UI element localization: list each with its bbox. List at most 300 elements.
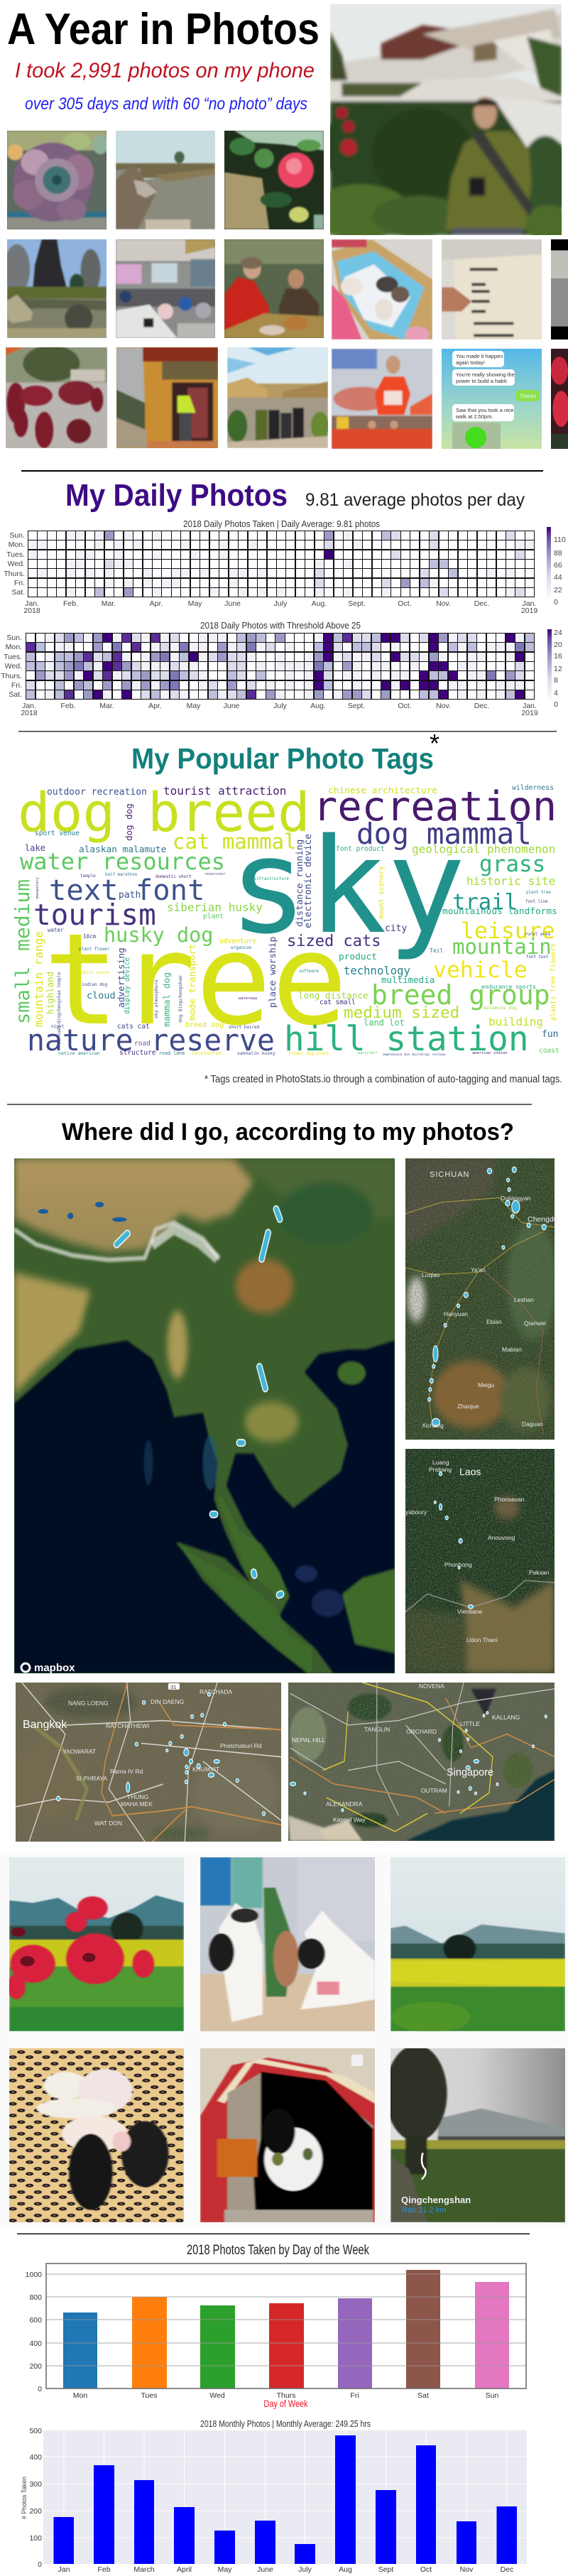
- heatmap 1 colorbar: [547, 527, 566, 607]
- bar chart: photos by day of week: Fri: [350, 2391, 359, 2400]
- bar chart: photos by day of week: 0: [38, 2385, 42, 2393]
- word cloud: water resources: [20, 848, 225, 875]
- bar chart: monthly photos: Dec: [501, 2565, 513, 2574]
- word cloud: sport venue: [35, 830, 80, 837]
- heatmap 2 day labels: Sun.: [6, 634, 22, 642]
- bar chart: photos by day of week: 800: [29, 2293, 42, 2302]
- heatmap 1 month labels: Jan.: [25, 599, 39, 608]
- heatmap 1 month labels: Sept.: [348, 599, 366, 608]
- map: Laos: Laos: [459, 1466, 481, 1477]
- photo: activity app messages: Saw that you took a nice: [456, 407, 514, 413]
- word cloud: dog dog: [124, 803, 134, 841]
- word cloud: tourist attraction: [163, 784, 286, 798]
- word cloud: geological phenomenon: [412, 842, 555, 856]
- map: Singapore: ORCHARD: [406, 1728, 437, 1735]
- photo: handwriting notebook: [442, 239, 542, 339]
- subtitle: total photos: I took 2,991 photos on my phone: [15, 59, 315, 82]
- asterisk: *: [430, 729, 439, 758]
- heatmap 2 colorbar: 20: [554, 641, 562, 649]
- photo: man in doorway: [116, 347, 218, 448]
- word cloud: display device: [124, 957, 131, 1014]
- bar chart: photos by day of week: 200: [29, 2362, 42, 2371]
- map: Sichuan: Leshan: [514, 1296, 534, 1303]
- average photos text: 9.81 average photos per day: [305, 490, 525, 510]
- heatmap 1 month labels: 2018: [23, 607, 40, 615]
- word cloud: advertising: [116, 947, 127, 1008]
- word cloud: outdoor recreation: [47, 787, 147, 798]
- word cloud: rural area: [525, 932, 551, 937]
- map: Laos: Pakxan: [529, 1569, 550, 1576]
- heatmap 2 month labels: Dec.: [474, 702, 489, 710]
- chart title: day of week: 2018 Photos Taken by Day of the Week: [187, 2243, 369, 2258]
- photo: marathon runner collage: [332, 349, 432, 449]
- heading: where did I go: Where did I go, according to my photos?: [62, 1119, 514, 1146]
- map: Singapore: ALEXANDRA: [326, 1800, 363, 1808]
- word cloud: 10cm: [83, 933, 97, 940]
- word cloud: siberian husky: [167, 901, 263, 914]
- heatmap 1 day labels: Wed.: [8, 560, 25, 568]
- map: Bangkok: [11, 1683, 281, 1842]
- map: Laos: Prabang: [429, 1466, 452, 1473]
- bar chart: photos by day of week: [26, 2243, 526, 2409]
- map: Bangkok: Rama IV Rd: [110, 1768, 143, 1775]
- heatmap 1 month labels: Oct.: [398, 599, 412, 608]
- heatmap 2 day labels: Tues.: [4, 653, 22, 661]
- photo: red camellia: [224, 131, 324, 229]
- word cloud: nature reserve: [27, 1023, 275, 1058]
- word cloud: long distance: [298, 990, 368, 1001]
- bar chart: photos by day of week: 400: [29, 2339, 42, 2348]
- photo: activity app messages: Thanks: [520, 394, 536, 399]
- word cloud: breed dog: [185, 1021, 224, 1029]
- photo: activity app messages: again today!: [456, 359, 485, 366]
- photo: tower and lake: [7, 239, 106, 338]
- word cloud: electronic device: [303, 834, 314, 928]
- chart title: monthly: 2018 Monthly Photos | Monthly Average: 249.25 hrs: [200, 2418, 371, 2429]
- map: Bangkok: Phetchaburi Rd: [220, 1742, 262, 1749]
- heatmap 2 month labels: 2019: [521, 709, 538, 717]
- heatmap 2 month labels: Feb.: [60, 702, 76, 710]
- word cloud: tourism: [33, 898, 156, 932]
- word cloud: medium sized: [344, 1004, 459, 1022]
- map: Bangkok: THUNG: [127, 1793, 148, 1800]
- word cloud: water: [48, 927, 64, 933]
- map: Singapore: TANGLIN: [364, 1726, 390, 1733]
- word cloud: technology: [344, 964, 410, 977]
- word cloud: highland: [45, 972, 55, 1014]
- map: Bangkok: DIN DAENG: [151, 1698, 184, 1705]
- word cloud: trail: [452, 890, 518, 915]
- photo: partial street: [551, 239, 568, 339]
- word cloud: husky dog: [104, 923, 213, 947]
- word cloud: place worship: [268, 937, 278, 1008]
- heatmap 1 colorbar: 22: [554, 586, 562, 594]
- heatmap 2 colorbar: 4: [554, 689, 558, 697]
- map: Sichuan: Ebian: [486, 1318, 502, 1325]
- section rule: [17, 2233, 530, 2234]
- map: Singapore: NOVENA: [419, 1683, 444, 1690]
- map: Laos: Anouvong: [488, 1534, 515, 1541]
- heatmap 1 day labels: Tues.: [6, 550, 25, 559]
- section rule: [7, 1104, 532, 1105]
- bar chart: photos by day of week: 1000: [26, 2271, 42, 2279]
- word cloud: breed group: [371, 979, 550, 1011]
- heatmap 1 month labels: July: [274, 599, 288, 608]
- bar chart: monthly photos: Sept: [378, 2565, 393, 2574]
- bar chart: monthly photos: 100: [29, 2534, 42, 2543]
- word cloud: Sichuan Qingchengshan temple: [57, 972, 62, 1044]
- bar chart: monthly photos: Nov: [460, 2565, 474, 2574]
- bar chart: monthly photos: 300: [29, 2480, 42, 2489]
- photo: activity app messages: You're really showing the: [456, 371, 515, 378]
- photo: rapeseed field and mountains: [390, 1857, 565, 2031]
- word cloud: cloud: [87, 990, 116, 1001]
- word cloud: font product: [336, 845, 385, 853]
- word cloud: mount scenery: [378, 866, 386, 919]
- heatmap 2 day labels: Fri.: [11, 681, 22, 690]
- word cloud: waterway: [239, 996, 258, 1001]
- map: Sichuan: Qianwei: [524, 1320, 546, 1327]
- heatmap 2 colorbar: 12: [554, 665, 562, 673]
- bar chart: monthly photos: July: [298, 2565, 312, 2574]
- y axis label: # Photos Taken: [21, 2477, 28, 2519]
- heatmap 1 month labels: May: [188, 599, 202, 608]
- heatmap 1 month labels: Apr.: [150, 599, 163, 608]
- word cloud: Teil: [430, 947, 443, 954]
- word cloud: cat mammal: [173, 830, 297, 854]
- map: Laos: yaboury: [405, 1509, 427, 1516]
- heatmap 2 month labels: May: [187, 702, 201, 710]
- heading: My Daily Photos: My Daily Photos: [65, 478, 288, 513]
- word cloud: infrastructure: [254, 877, 289, 881]
- map: Bangkok: MAHA MEK: [121, 1800, 153, 1808]
- word cloud: road lane: [159, 1050, 185, 1056]
- word cloud: vehicle: [433, 957, 528, 983]
- bar chart: monthly photos: Jan: [58, 2565, 70, 2574]
- word cloud: temple: [80, 874, 96, 879]
- word cloud: sized cats: [287, 933, 381, 950]
- word cloud: grass: [479, 852, 545, 877]
- hero photo: man at Potala Palace: [330, 4, 562, 235]
- word cloud: chinese architecture: [328, 786, 437, 796]
- heatmap 2 month labels: Mar.: [99, 702, 114, 710]
- heatmap 2 title: 2018 Daily Photos with Threshold Above 25: [200, 621, 361, 631]
- word cloud: sky atmosphere: [153, 979, 159, 1018]
- map: Singapore: OUTRAM: [421, 1787, 447, 1794]
- word cloud: sakhalin husky: [237, 1050, 275, 1056]
- bar chart: photos by day of week: Sat: [417, 2391, 429, 2400]
- photo: husky by river: [116, 131, 215, 229]
- heatmap 1 month labels: Dec.: [474, 599, 489, 608]
- map: Southeast Asia overview: [14, 1158, 395, 1674]
- bar chart: photos by day of week: 600: [29, 2316, 42, 2325]
- word cloud: indian dog: [82, 982, 108, 987]
- title: A Year in Photos: [7, 5, 320, 54]
- heatmap 1 month labels: 2019: [521, 607, 537, 615]
- heatmap 1 month labels: [23, 599, 537, 615]
- word cloud: historic site: [466, 874, 555, 888]
- photo: Qingchengshan run: Ran 21.2 km: [402, 2206, 446, 2214]
- bar chart: photos by day of week: Thurs: [277, 2391, 295, 2400]
- photo: activity app messages: walk at 2:50pm.: [455, 413, 493, 420]
- map: Bangkok: KHUMVIT: [192, 1766, 219, 1773]
- bar chart: monthly photos: 0: [38, 2560, 42, 2569]
- photo: newborn kittens on leopard fabric: [9, 2048, 184, 2222]
- word cloud: dog mammal: [356, 817, 532, 851]
- word cloud: city: [385, 923, 407, 934]
- photo: activity app messages: [442, 349, 542, 449]
- word cloud: multimedia: [381, 974, 435, 985]
- map: Sichuan: [405, 1158, 558, 1440]
- photo: debating monks: [6, 347, 107, 448]
- heatmap 1 colorbar: 88: [554, 549, 562, 558]
- photo: activity app messages: You made it happen: [456, 353, 503, 359]
- word cloud: adventure: [219, 938, 256, 945]
- bar chart: photos by day of week: Sun: [486, 2391, 498, 2400]
- heatmap 2 colorbar: 24: [554, 629, 562, 637]
- map: Sichuan: Dujiangyan: [501, 1195, 531, 1202]
- word cloud: half marathon: [105, 873, 137, 877]
- word cloud: endurance sports: [481, 984, 536, 990]
- heatmap 1 month labels: Mar.: [102, 599, 116, 608]
- word cloud: font text: [526, 955, 548, 960]
- map: Sichuan: Ya'an: [471, 1266, 486, 1273]
- word cloud: lake: [25, 843, 45, 853]
- map: Sichuan: Mabian: [502, 1346, 522, 1353]
- heatmap 2 month labels: June: [224, 702, 240, 710]
- bar chart: monthly photos: Oct: [420, 2565, 432, 2574]
- bar chart: monthly photos: Feb: [97, 2565, 111, 2574]
- word cloud: short haired: [229, 1025, 260, 1030]
- word cloud: alaskan malamute: [79, 844, 166, 855]
- heatmap 2 colorbar: [547, 629, 562, 709]
- map: Bangkok: Bangkok: [23, 1719, 67, 1731]
- bar chart: monthly photos: March: [133, 2565, 155, 2574]
- photo: activity app messages: power to build a habit.: [456, 378, 508, 384]
- map: Laos: [405, 1449, 555, 1673]
- word cloud: plant tree: [526, 891, 551, 895]
- word cloud: software: [299, 969, 319, 974]
- heatmap 1: daily photos taken: [28, 531, 535, 597]
- heatmap 1 day labels: Fri.: [14, 579, 25, 587]
- photo: partial red flowers: [551, 349, 568, 449]
- photo: cat in cat house: [200, 2048, 375, 2222]
- photo: two men eating: [224, 239, 324, 338]
- map: Bangkok: WAT DON: [94, 1820, 122, 1827]
- heatmap 1 colorbar: 0: [554, 598, 558, 607]
- word cloud: native american: [58, 1050, 100, 1056]
- word cloud: road: [134, 1040, 151, 1048]
- map: Singapore: KALLANG: [492, 1714, 520, 1721]
- map: Southeast Asia overview: mapbox: [34, 1662, 75, 1674]
- heatmap 1 day labels: Thurs.: [4, 570, 25, 578]
- map: Singapore: Singapore: [447, 1767, 493, 1778]
- heatmap 2: daily photos with threshold: [26, 633, 535, 700]
- bar chart: monthly photos: April: [177, 2565, 192, 2574]
- x axis label: day of week: Day of Week: [264, 2398, 308, 2409]
- heatmap 2 month labels: Aug.: [310, 702, 326, 710]
- heatmap 1 day labels: Sun.: [9, 531, 25, 540]
- word cloud: path: [119, 890, 141, 901]
- word cloud: mode transport: [187, 944, 198, 1021]
- word cloud: fun: [542, 1029, 558, 1040]
- word cloud: mountain: [452, 935, 552, 959]
- heatmap 2 month labels: Nov.: [436, 702, 451, 710]
- heatmap 1 title: 2018 Daily Photos Taken | Daily Average: 9.81 photos: [183, 519, 380, 529]
- map: Singapore: LITTLE: [460, 1720, 480, 1727]
- map: Laos: Luang: [432, 1459, 449, 1466]
- photo: classroom: [116, 239, 215, 338]
- heatmap 1 colorbar: 110: [554, 536, 566, 544]
- map: Singapore: [288, 1683, 555, 1841]
- bar chart: monthly photos: 500: [29, 2427, 42, 2435]
- heatmap 2 colorbar: 16: [554, 652, 562, 661]
- heatmap 2 day labels: [1, 634, 22, 699]
- heatmap 2 month labels: Oct.: [398, 702, 412, 710]
- word cloud: monastery: [36, 877, 40, 898]
- heatmap 2 month labels: Jan.: [523, 702, 537, 710]
- word cloud: american indian: [472, 1051, 508, 1055]
- heatmap 2 day labels: Thurs.: [1, 672, 22, 680]
- faint photo backdrop: [0, 1852, 568, 2227]
- word cloud: dog Qingchengshan: [178, 975, 183, 1023]
- map: Sichuan: Chengdu: [528, 1215, 558, 1224]
- map: Laos: Phonsavan: [494, 1496, 525, 1503]
- heatmap 1 month labels: Jan.: [523, 599, 536, 608]
- map: Laos: Udon Thani: [466, 1636, 498, 1643]
- bar chart: monthly photos: Aug: [339, 2565, 352, 2574]
- word cloud: night: [51, 1024, 64, 1029]
- word cloud: land lot: [364, 1018, 405, 1028]
- bar chart: monthly photos: [21, 2418, 527, 2574]
- heatmap 2 month labels: Sept.: [348, 702, 365, 710]
- word cloud: medium: [11, 879, 34, 951]
- heatmap 1 month labels: Feb.: [63, 599, 78, 608]
- map: Bangkok: NANG LOENG: [68, 1700, 109, 1707]
- map: Sichuan: Hanyuan: [444, 1310, 468, 1317]
- heatmap 1 day labels: Mon.: [9, 540, 25, 549]
- word cloud: sky: [229, 810, 466, 963]
- word cloud: organism: [231, 945, 251, 950]
- heatmap 1 day labels: [4, 531, 25, 597]
- word cloud: tree: [43, 906, 348, 1053]
- photo: Qingchengshan run: Qingchengshan: [401, 2195, 471, 2205]
- word cloud: coast: [539, 1047, 559, 1055]
- photo: succulent: [7, 131, 106, 229]
- heatmap 1 month labels: June: [224, 599, 241, 608]
- word cloud: plant flower: [79, 947, 110, 952]
- heatmap 2 day labels: Sat.: [9, 690, 22, 699]
- word cloud: [11, 781, 559, 1059]
- bar chart: monthly photos: 200: [29, 2507, 42, 2516]
- heatmap 2 day labels: Mon.: [6, 643, 22, 651]
- heatmap 2 day labels: Wed.: [5, 662, 22, 670]
- bar chart: monthly photos: June: [257, 2565, 273, 2574]
- map: Laos: Vientiane: [457, 1608, 483, 1615]
- word cloud: mountain range: [32, 931, 45, 1027]
- heatmap 2 month labels: [21, 702, 538, 717]
- word cloud: cats cat: [117, 1023, 150, 1031]
- section rule: [18, 731, 557, 732]
- map: Sichuan: Zhaojue: [457, 1403, 479, 1410]
- word cloud: small: [12, 967, 34, 1024]
- word cloud: building: [488, 1015, 543, 1028]
- word cloud: reservoir: [204, 872, 226, 876]
- photo: red blossom and rapeseed field: [9, 1857, 184, 2031]
- map: Sichuan: Meigu: [478, 1381, 494, 1388]
- word cloud: plants tree flowers: [550, 943, 557, 1021]
- word cloud: leisure: [461, 918, 555, 944]
- word cloud: waterfall: [358, 1051, 378, 1055]
- bar chart: monthly photos: May: [218, 2565, 232, 2574]
- map: Singapore: Keppel Way: [333, 1816, 366, 1823]
- map: Bangkok: SI PHRAYA: [76, 1775, 107, 1782]
- word cloud: mountainous landforms: [442, 906, 557, 917]
- bar chart: monthly photos: 400: [29, 2453, 42, 2462]
- heatmap 1 month labels: Nov.: [436, 599, 451, 608]
- photo: group at temple: [227, 347, 328, 448]
- map: Laos: Phonhong: [444, 1561, 472, 1568]
- word cloud: flower dog plant: [288, 1051, 329, 1056]
- photo: Qingchengshan run: [386, 2045, 565, 2222]
- heatmap 1 colorbar: 44: [554, 573, 562, 582]
- map: Singapore: NEPAL HILL: [292, 1737, 326, 1744]
- word cloud: amphibious bus buildings railway: [383, 1053, 446, 1057]
- heatmap 1 colorbar: 66: [554, 561, 562, 570]
- map: Bangkok: 31: [170, 1684, 176, 1690]
- map: Bangkok: RATCHADA: [200, 1688, 232, 1695]
- heatmap 2 month labels: 2018: [21, 709, 38, 717]
- heatmap 1 month labels: Aug.: [312, 599, 327, 608]
- word cloud: structure: [119, 1049, 156, 1057]
- word cloud: domestic short: [155, 874, 192, 879]
- word cloud: distance running: [295, 839, 305, 927]
- heatmap 1 day labels: Sat.: [11, 588, 25, 597]
- photo: cat carrying kitten: [200, 1857, 375, 2031]
- section rule: [21, 470, 543, 472]
- word cloud: plant: [203, 913, 224, 920]
- word cloud: dog breed: [18, 781, 310, 844]
- map: Sichuan: Daguan: [522, 1420, 543, 1428]
- photo: kittens in crib: [332, 239, 432, 339]
- word cloud: malamute dog: [484, 1005, 517, 1011]
- word cloud: wilderness: [512, 784, 554, 792]
- map: Sichuan: Luqiao: [422, 1271, 440, 1278]
- heatmap 2 colorbar: 0: [554, 700, 558, 709]
- heatmap 2 month labels: July: [273, 702, 288, 710]
- word cloud: carnivoran: [192, 1050, 222, 1056]
- word cloud: text font: [49, 873, 204, 907]
- word cloud: recreation: [313, 783, 557, 830]
- bar chart: photos by day of week: Tues: [141, 2391, 157, 2400]
- map: Sichuan: Xichang: [422, 1422, 444, 1429]
- word cloud: public space: [78, 970, 109, 975]
- heatmap 2 month labels: Jan.: [22, 702, 36, 710]
- map: Sichuan: SICHUAN: [430, 1170, 470, 1179]
- map: Bangkok: RATCHATHEWI: [106, 1722, 149, 1729]
- subtitle: days: over 305 days and with 60 “no photo” days: [25, 94, 307, 114]
- word cloud: font line: [525, 900, 548, 904]
- word cloud: hill station: [284, 1020, 529, 1059]
- heatmap 2 month labels: Apr.: [148, 702, 162, 710]
- word cloud: cat small: [320, 999, 356, 1006]
- heatmap 2 colorbar: 8: [554, 676, 558, 685]
- heading: My Popular Photo Tags: My Popular Photo Tags: [131, 742, 434, 775]
- word cloud: product: [339, 952, 377, 962]
- bar chart: photos by day of week: Wed: [209, 2391, 225, 2400]
- word cloud: mammal dog: [162, 972, 173, 1027]
- bar chart: photos by day of week: Mon: [73, 2391, 87, 2400]
